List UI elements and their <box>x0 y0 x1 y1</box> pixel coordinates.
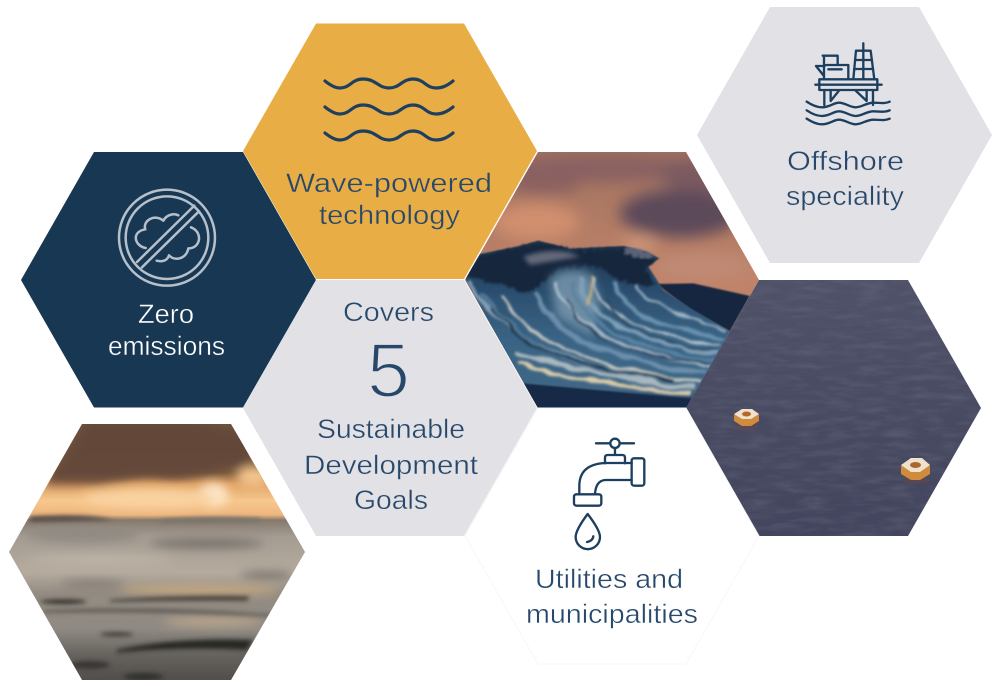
streaks <box>470 278 727 395</box>
heading: wave-powered technology: technology <box>319 200 461 230</box>
crest shadow <box>465 243 657 293</box>
panel: offshore speciality <box>697 7 992 263</box>
heading: wave-powered technology: Wave-powered <box>286 168 492 198</box>
heading: utilities and municipalities: municipalities <box>526 599 698 629</box>
text: sustainable development goals: Development <box>304 450 479 480</box>
icon: left wave energy buoy <box>734 409 759 430</box>
heading: utilities and municipalities <box>526 564 698 629</box>
spray <box>523 251 580 265</box>
heading: zero emissions: emissions <box>108 331 225 361</box>
text: sustainable development goals: Sustainable <box>317 414 465 444</box>
icon: no emissions cloud <box>119 190 215 286</box>
sky clouds <box>493 155 753 279</box>
back swell <box>657 283 750 332</box>
heading: offshore speciality: speciality <box>786 181 905 211</box>
icon: three waves <box>325 79 453 140</box>
heading: wave-powered technology <box>286 168 492 230</box>
panel: zero emissions <box>21 152 316 408</box>
heading: offshore speciality: Offshore <box>787 146 904 176</box>
panel: sunset sea photograph <box>9 420 305 680</box>
panel: five sustainable development goals <box>243 280 537 536</box>
heading: zero emissions <box>108 299 225 361</box>
wave body <box>463 241 730 407</box>
icon: right wave energy buoy <box>901 458 930 484</box>
text: sustainable development goals <box>304 414 479 515</box>
text: covers: Covers <box>343 297 434 327</box>
panel: wave-powered technology <box>243 24 537 279</box>
number: 5 goals: 5 <box>367 328 410 414</box>
icon: water tap with drop <box>574 439 644 549</box>
panel: utilities and municipalities <box>465 408 759 664</box>
foam face <box>550 270 600 337</box>
panel: wave photograph <box>463 152 759 413</box>
heading: zero emissions: Zero <box>138 299 194 329</box>
heading: utilities and municipalities: Utilities and <box>535 564 683 594</box>
heading: offshore speciality <box>786 146 905 211</box>
icon: offshore rig <box>807 43 890 124</box>
panel: buoys on water photograph <box>686 280 981 536</box>
bottom shadow <box>524 382 692 408</box>
text: sustainable development goals: Goals <box>354 485 428 515</box>
